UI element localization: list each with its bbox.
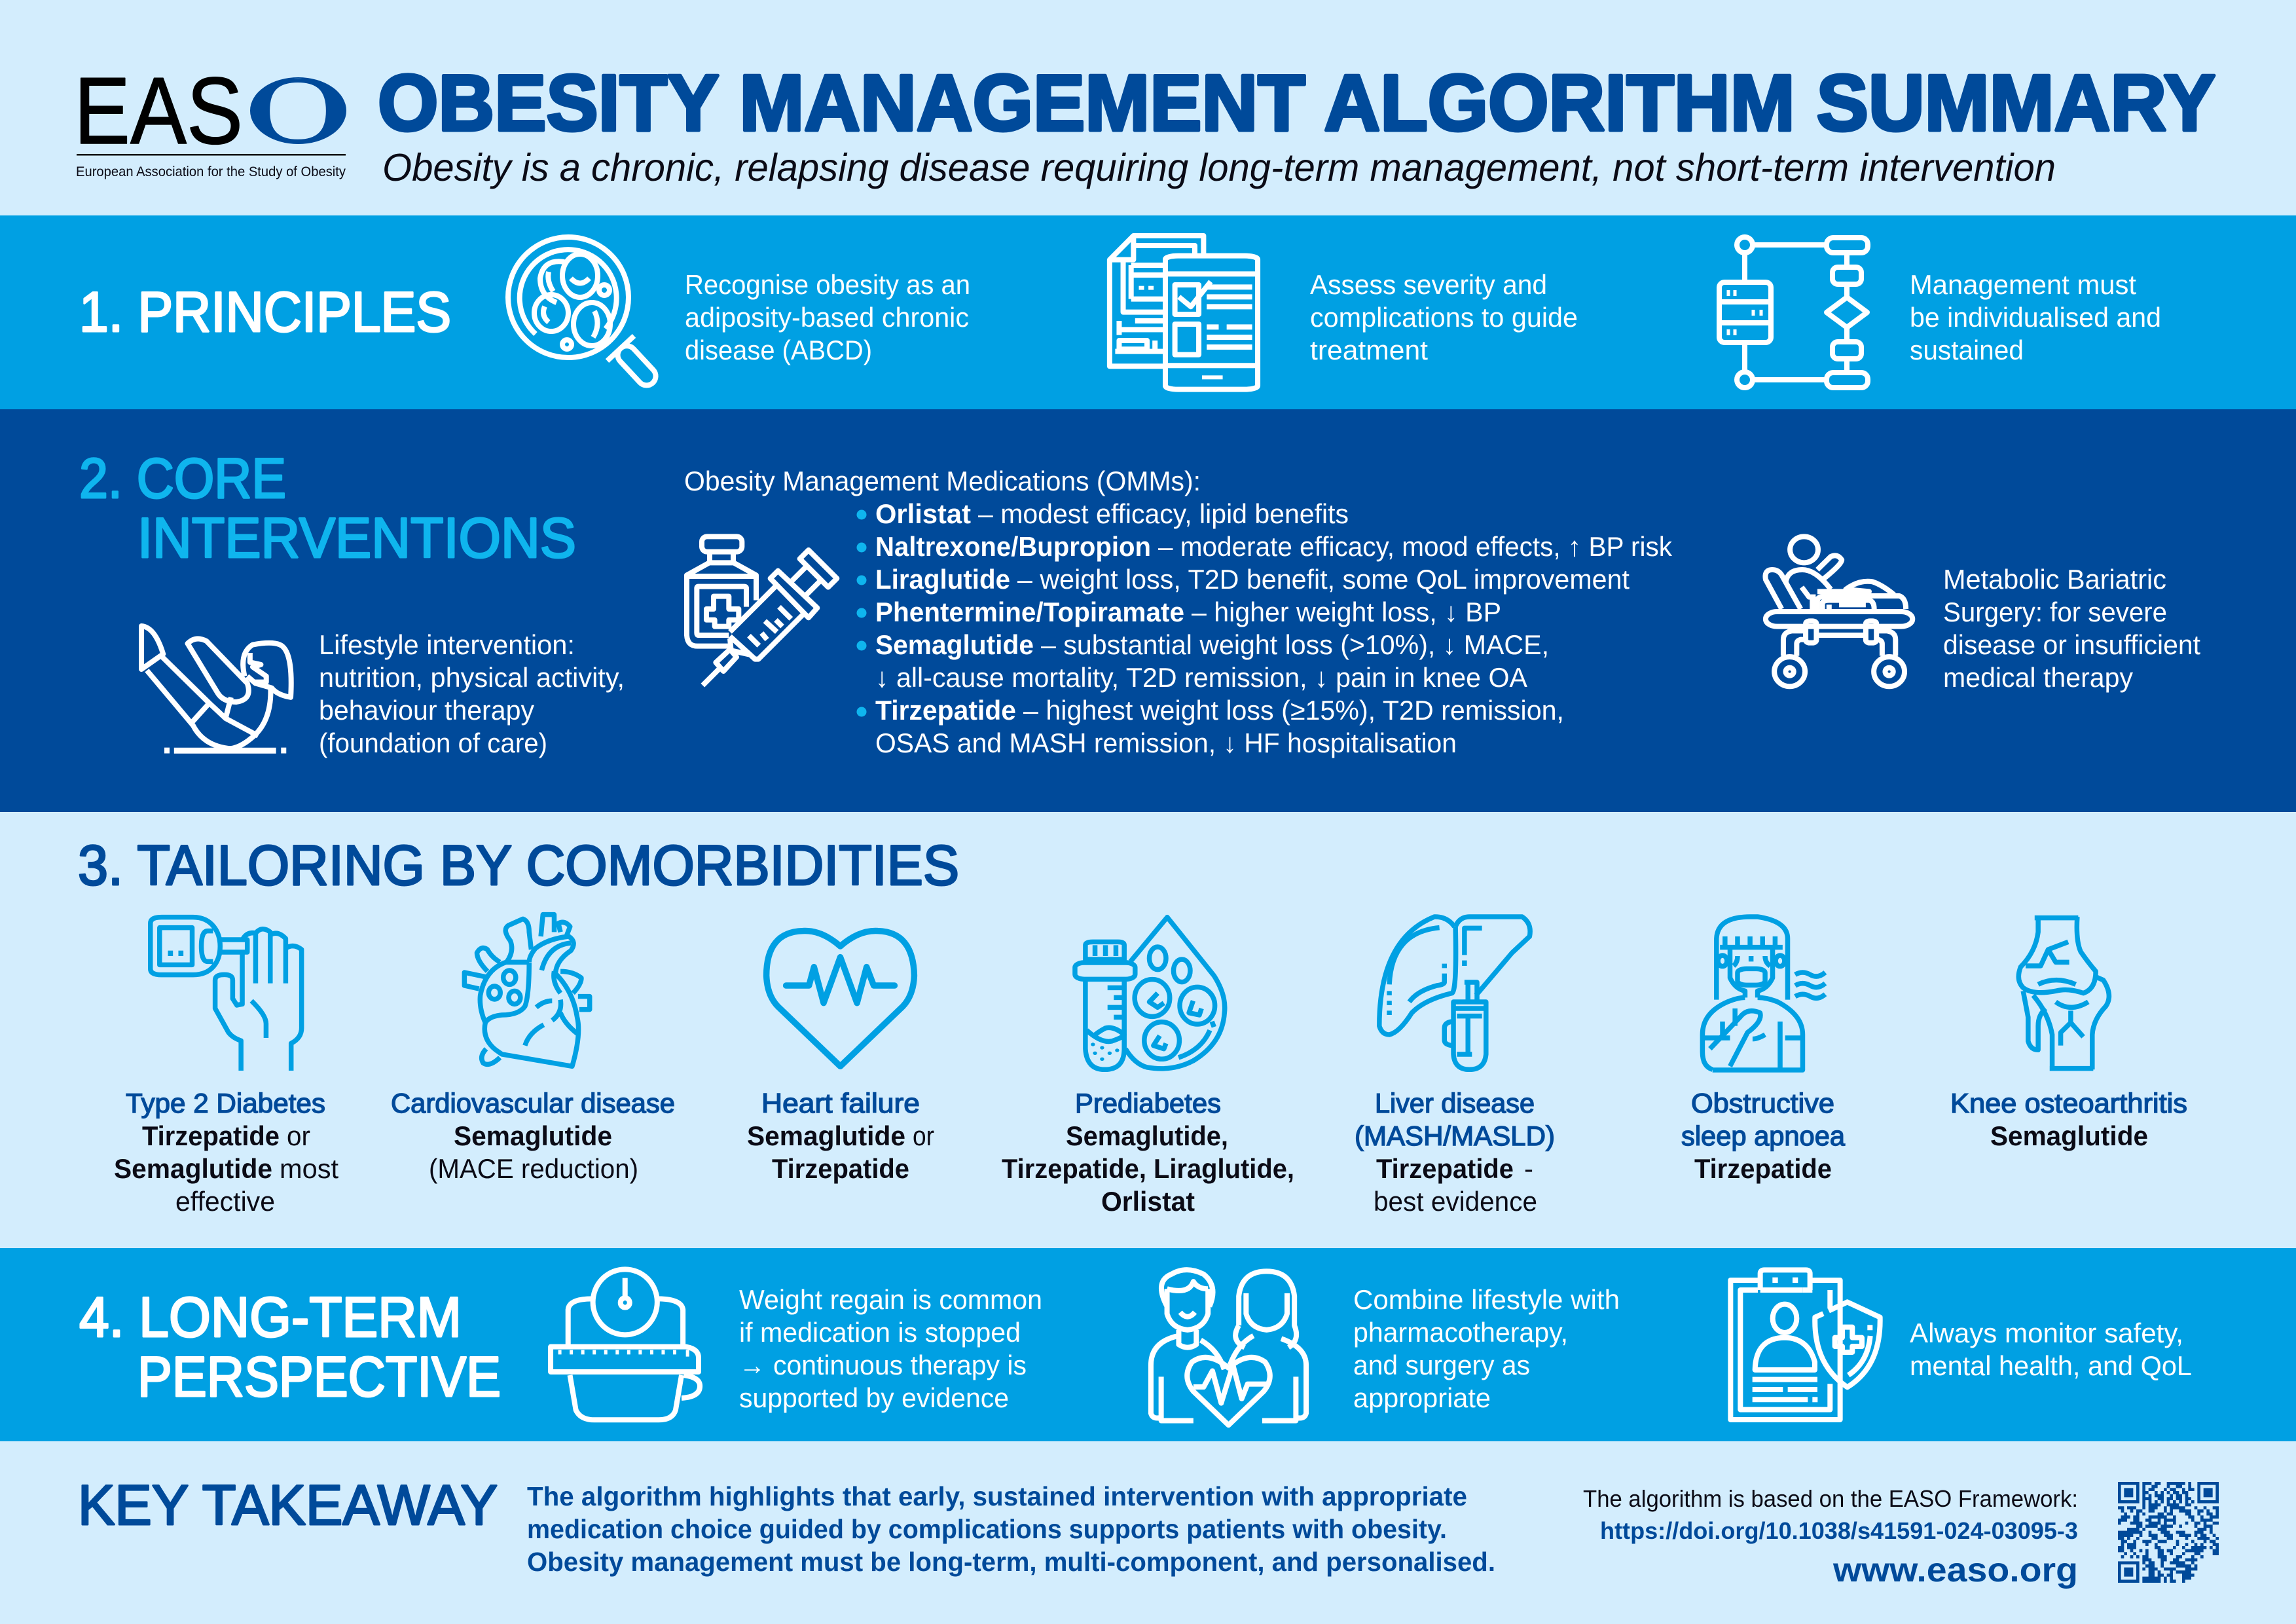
panel: 2. core interventions: [0, 409, 2296, 812]
label: type 2 diabetes: most: [280, 1153, 338, 1184]
panel: 3. tailoring by comorbidities: [78, 834, 2187, 1217]
text: takeaway summary: medication choice guided by complications supports patients with obesity.: [527, 1514, 1447, 1544]
text: combine lifestyle: and surgery as: [1353, 1350, 1530, 1380]
icon: exercising person: [141, 626, 291, 754]
label: knee osteoarthritis: Semaglutide: [1990, 1120, 2148, 1151]
icon: patient on stretcher: [1765, 536, 1912, 686]
label: knee osteoarthritis: Knee osteoarthritis: [1950, 1088, 2187, 1118]
text: weight regain: if medication is stopped: [739, 1317, 1021, 1348]
label: liver disease: best evidence: [1374, 1186, 1537, 1217]
label: type 2 diabetes: [114, 1088, 338, 1217]
icon: medicine bottle and syringe: [687, 536, 837, 686]
icon: anatomical heart: [464, 915, 590, 1066]
label: heart failure: or: [913, 1120, 934, 1151]
text: medications list: – highest weight loss (≥15%), T2D remission,: [1023, 695, 1564, 726]
text: medications list: – moderate efficacy, mood effects, ↑ BP risk: [1158, 531, 1673, 562]
text: recognise obesity: disease (ABCD): [685, 335, 872, 365]
label: heart failure: [747, 1088, 934, 1184]
icon: heart with pulse: [767, 931, 914, 1066]
label: obstructive sleep apnoea: Obstructive: [1691, 1088, 1834, 1118]
label: heart failure: Heart failure: [761, 1088, 920, 1118]
heading: long-term perspective: [79, 1286, 501, 1409]
bullet markers: [856, 509, 867, 716]
text: medications list: – modest efficacy, lipid benefits: [978, 498, 1349, 529]
label: obstructive sleep apnoea: sleep apnoea: [1681, 1120, 1846, 1151]
text: medications list: ↓ all-cause mortality, T2D remission, ↓ pain in knee OA: [875, 662, 1527, 693]
panel: 1. principles: [0, 215, 2296, 409]
text: metabolic bariatric surgery: [1943, 564, 2200, 693]
label: liver disease: -: [1524, 1153, 1533, 1184]
text: monitor safety: mental health, and QoL: [1910, 1350, 2192, 1381]
icon: scale and tape measure: [551, 1269, 700, 1420]
text: medications list: Liraglutide: [875, 564, 1010, 595]
heading: core interventions: 2. CORE: [79, 447, 286, 510]
panel: key takeaway footer: [78, 1474, 2219, 1589]
label: type 2 diabetes: Type 2 Diabetes: [126, 1088, 325, 1118]
text: medications list: Semaglutide: [875, 629, 1034, 660]
text: medications list: Phentermine/Topiramate: [875, 597, 1184, 627]
heading: long-term perspective: PERSPECTIVE: [137, 1346, 501, 1409]
heading: principles: 1. PRINCIPLES: [79, 281, 451, 344]
text: assess severity: complications to guide: [1310, 302, 1578, 333]
text: framework reference: [1583, 1485, 2078, 1589]
text: recognise obesity: Recognise obesity as an: [685, 269, 970, 300]
text: framework reference: https://doi.org/10.1038/s41591-024-03095-3: [1600, 1517, 2078, 1544]
text: assess severity: Assess severity and: [1310, 269, 1547, 300]
icon: clipboard with patient and shield: [1730, 1270, 1880, 1420]
label: type 2 diabetes: Tirzepatide: [142, 1120, 280, 1151]
label: prediabetes: [1002, 1088, 1294, 1217]
text: monitor safety: [1910, 1318, 2192, 1381]
label: knee osteoarthritis: [1950, 1088, 2187, 1151]
text: monitor safety: Always monitor safety,: [1910, 1318, 2183, 1348]
label: prediabetes: Orlistat: [1101, 1186, 1195, 1217]
icon: liver with test tube: [1379, 917, 1530, 1069]
text: medications list: – higher weight loss, ↓ BP: [1192, 597, 1501, 627]
text: weight regain: →: [739, 1350, 765, 1380]
text: recognise obesity: [685, 269, 970, 365]
text: management must be individualised: sustained: [1910, 335, 2024, 365]
label: liver disease: [1355, 1088, 1555, 1217]
text: medications list: Orlistat: [875, 498, 971, 529]
text: combine lifestyle: appropriate: [1353, 1382, 1491, 1413]
icon: flow diagram: [1719, 237, 1868, 388]
text: weight regain: Weight regain is common: [739, 1284, 1042, 1315]
text: lifestyle intervention: nutrition, physical activity,: [319, 662, 625, 693]
icon: magnifier with cells: [508, 237, 666, 396]
icon: blood drop and test tube: [1075, 917, 1225, 1069]
title: OBESITY MANAGEMENT ALGORITHM SUMMARY: [378, 58, 2215, 147]
text: takeaway summary: [527, 1481, 1495, 1577]
header: logo: O: [251, 57, 344, 163]
icon: knee joint: [2018, 917, 2109, 1069]
text: lifestyle intervention: [319, 629, 625, 758]
text: weight regain: supported by evidence: [739, 1382, 1009, 1413]
label: prediabetes: Semaglutide,: [1066, 1120, 1228, 1151]
subtitle: Obesity is a chronic, relapsing disease requiring long-term management, not short-term intervention: [382, 146, 2056, 189]
panel: 4. long-term perspective: [0, 1248, 2296, 1441]
text: medications list: – weight loss, T2D benefit, some QoL improvement: [1017, 564, 1630, 595]
text: framework reference: The algorithm is based on the EASO Framework:: [1583, 1485, 2078, 1512]
heading: long-term perspective: 4. LONG-TERM: [79, 1286, 462, 1349]
heading: key takeaway: KEY TAKEAWAY: [78, 1474, 498, 1537]
label: cardiovascular disease: Semaglutide: [454, 1120, 612, 1151]
text: weight regain: continuous therapy is: [773, 1350, 1027, 1380]
text: combine lifestyle: [1353, 1284, 1620, 1413]
text: metabolic bariatric surgery: medical therapy: [1943, 662, 2133, 693]
icon: glucose meter and hand: [151, 917, 302, 1071]
text: combine lifestyle: Combine lifestyle with: [1353, 1284, 1620, 1315]
header: logo: EAS: [74, 58, 243, 164]
heading: tailoring: 3. TAILORING BY COMORBIDITIES: [78, 834, 959, 897]
label: liver disease: Liver disease: [1375, 1088, 1535, 1118]
text: lifestyle intervention: (foundation of care): [319, 728, 547, 758]
label: type 2 diabetes: Semaglutide: [114, 1153, 272, 1184]
text: framework reference: www.easo.org: [1832, 1551, 2078, 1589]
label: obstructive sleep apnoea: Tirzepatide: [1694, 1153, 1832, 1184]
text: lifestyle intervention: behaviour therapy: [319, 695, 534, 726]
header: logo: European Association for the Study of Obesity: [76, 164, 346, 179]
text: metabolic bariatric surgery: Metabolic Bariatric: [1943, 564, 2166, 595]
label: obstructive sleep apnoea: [1681, 1088, 1846, 1184]
label: cardiovascular disease: [391, 1088, 675, 1184]
label: prediabetes: Prediabetes: [1075, 1088, 1221, 1118]
QR code: [2118, 1482, 2219, 1583]
text: medications list: Naltrexone/Bupropion: [875, 531, 1151, 562]
label: heart failure: Tirzepatide: [772, 1153, 909, 1184]
text: metabolic bariatric surgery: Surgery: for severe: [1943, 597, 2167, 627]
text: assess severity: [1310, 269, 1578, 365]
label: cardiovascular disease: Cardiovascular disease: [391, 1088, 675, 1118]
label: prediabetes: Tirzepatide, Liraglutide,: [1002, 1153, 1294, 1184]
text: combine lifestyle: pharmacotherapy,: [1353, 1317, 1568, 1348]
text: takeaway summary: The algorithm highlights that early, sustained intervention with appropriate: [527, 1481, 1467, 1511]
text: management must be individualised: [1910, 269, 2161, 365]
label: type 2 diabetes: or: [287, 1120, 310, 1151]
label: liver disease: Tirzepatide: [1376, 1153, 1514, 1184]
text: management must be individualised: be individualised and: [1910, 302, 2161, 333]
text: management must be individualised: Management must: [1910, 269, 2136, 300]
text: takeaway summary: Obesity management must be long-term, multi-component, and personalised.: [527, 1547, 1495, 1577]
text: medications list: – substantial weight loss (>10%), ↓ MACE,: [1041, 629, 1549, 660]
text: medications list: Obesity Management Medications (OMMs):: [684, 466, 1201, 496]
text: medications list: OSAS and MASH remission, ↓ HF hospitalisation: [875, 728, 1457, 758]
text: metabolic bariatric surgery: disease or insufficient: [1943, 629, 2200, 660]
header: logo: [74, 57, 346, 179]
icon: couple holding heart: [1151, 1270, 1306, 1425]
heading: core interventions: INTERVENTIONS: [137, 507, 576, 570]
text: medications list: [684, 466, 1673, 758]
text: weight regain: [739, 1284, 1042, 1413]
label: type 2 diabetes: effective: [175, 1186, 275, 1217]
text: medications list: Tirzepatide: [875, 695, 1016, 726]
text: lifestyle intervention: Lifestyle intervention:: [319, 629, 575, 660]
label: cardiovascular disease: (MACE reduction): [429, 1153, 638, 1184]
label: heart failure: Semaglutide: [747, 1120, 905, 1151]
label: liver disease: (MASH/MASLD): [1355, 1120, 1555, 1151]
icon: documents and tablet: [1110, 236, 1258, 390]
icon: person with sleep apnoea: [1702, 917, 1825, 1070]
text: assess severity: treatment: [1310, 335, 1428, 365]
text: recognise obesity: adiposity-based chronic: [685, 302, 969, 333]
heading: core interventions: [79, 447, 576, 570]
